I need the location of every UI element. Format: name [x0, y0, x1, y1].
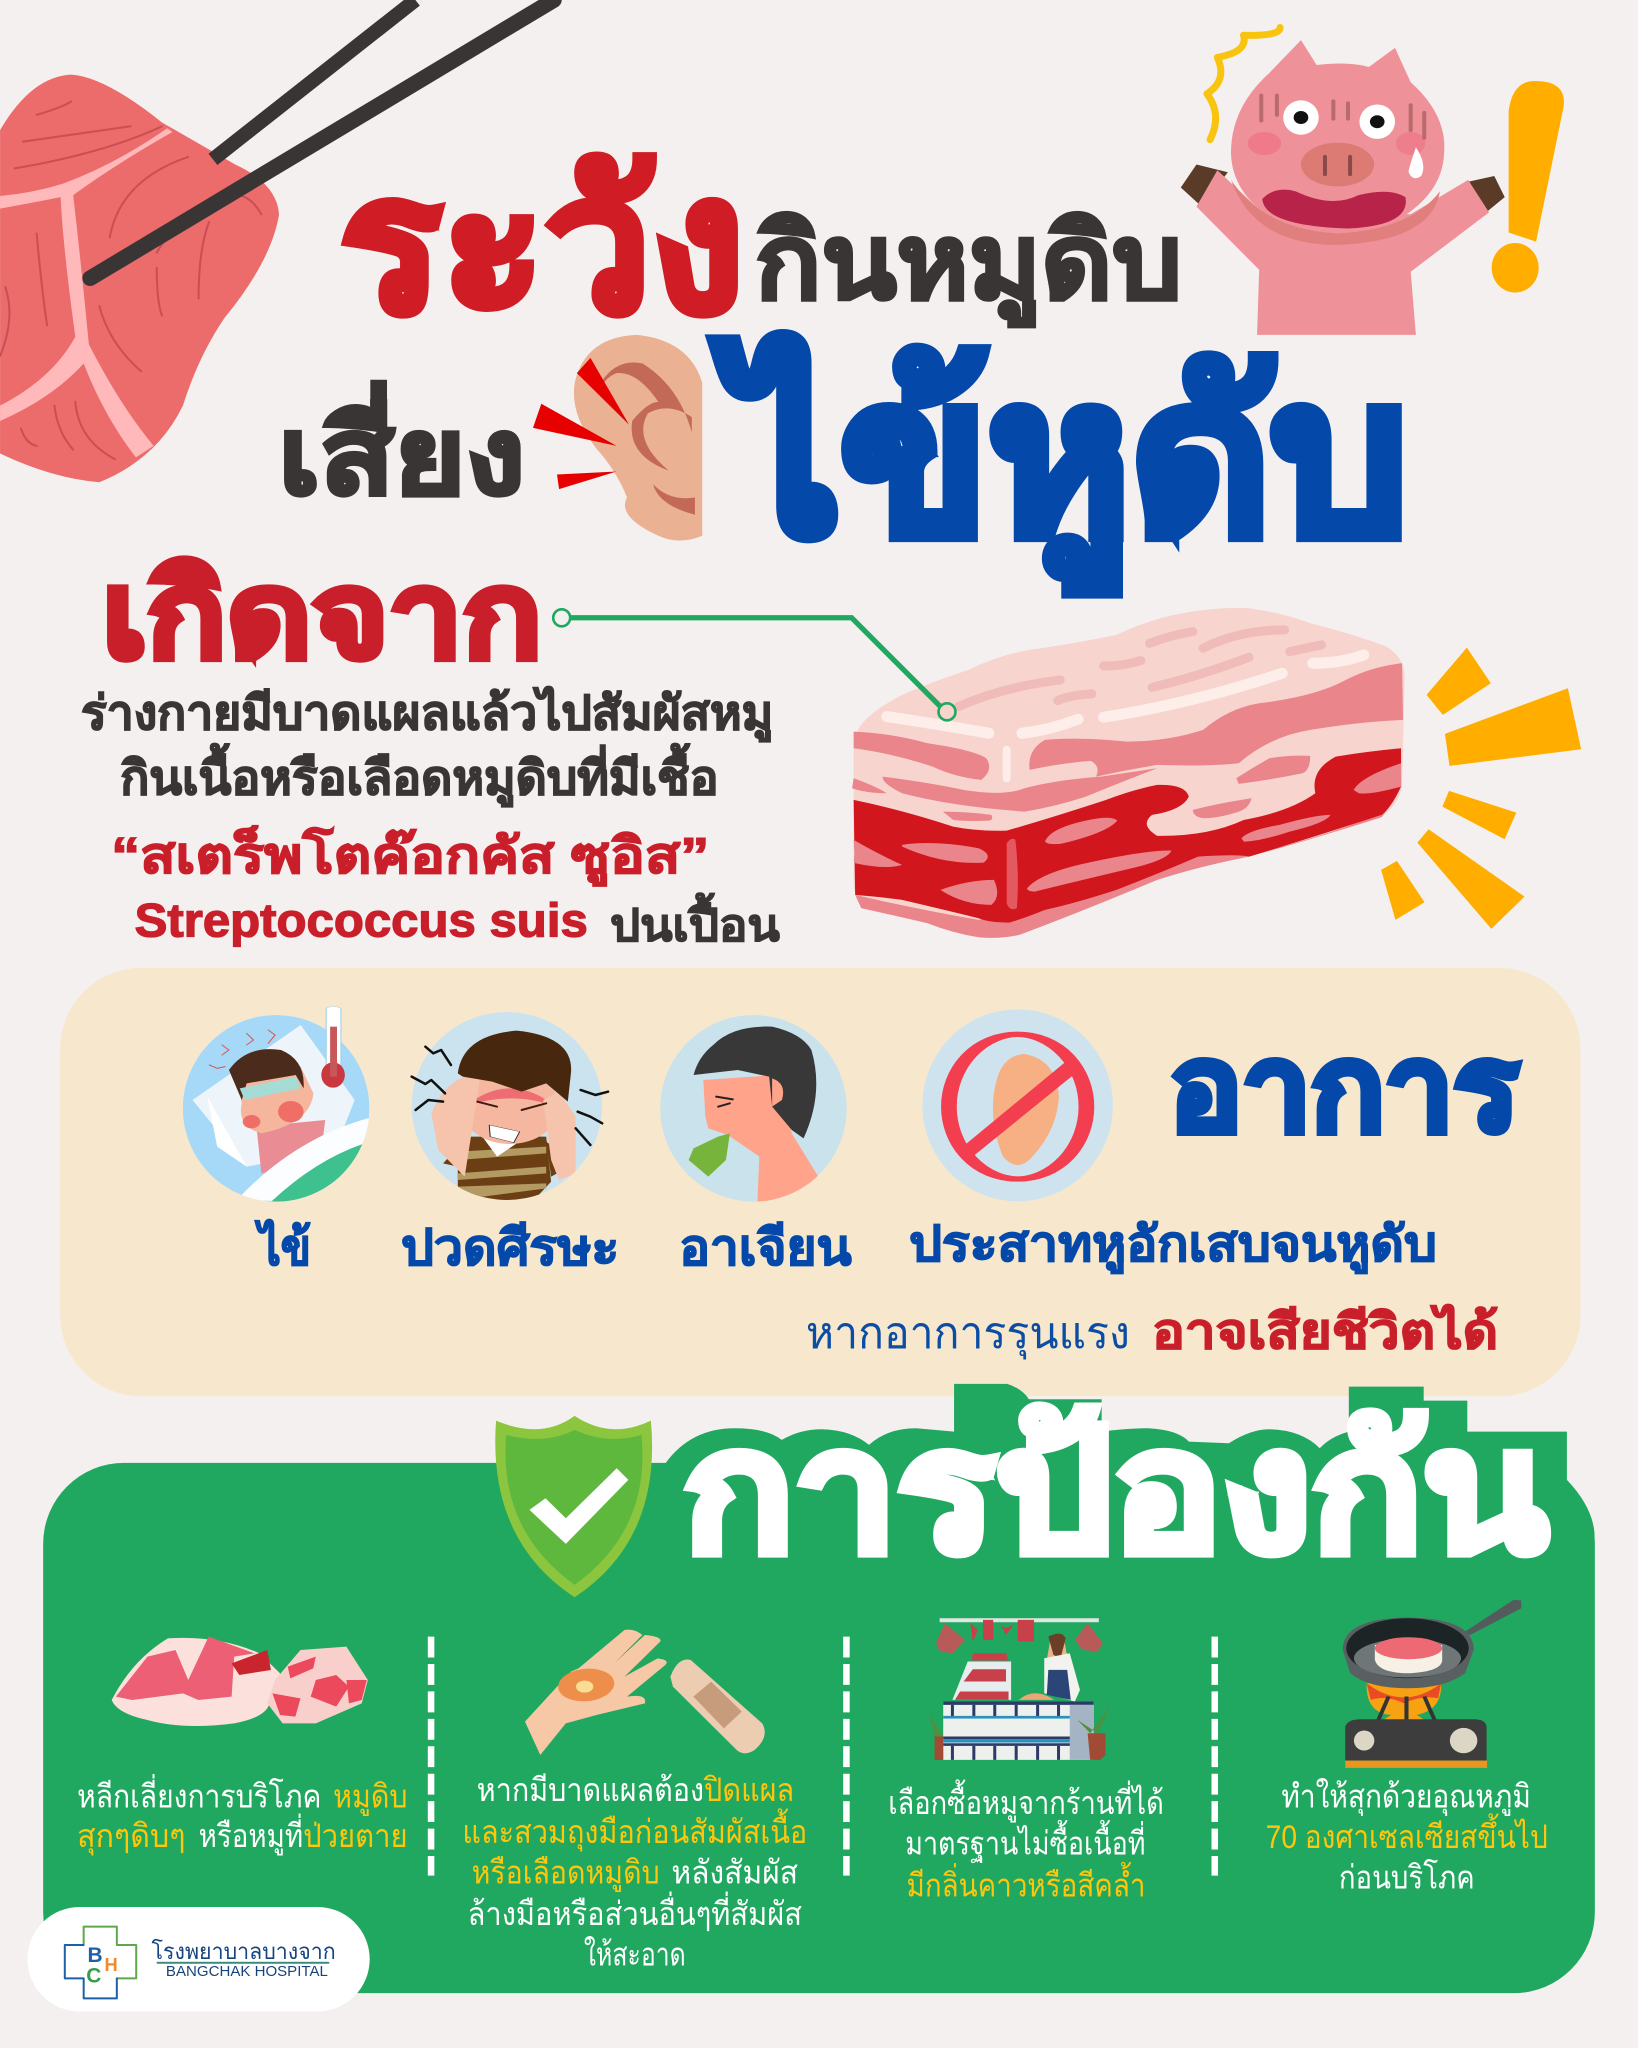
- text: เสี่ยง: เสี่ยง: [278, 382, 525, 517]
- item: cover wounds: [462, 1630, 807, 1973]
- panel: prevention: [43, 1384, 1595, 1993]
- logo: Bangchak Hospital: H: [105, 1954, 118, 1975]
- icon: shield with check: [495, 1416, 652, 1597]
- icon: vomiting: [660, 1015, 847, 1203]
- note: severity warning: หากอาการรุนแรง: [806, 1309, 1130, 1360]
- icon: wounded hand and plaster: [525, 1630, 765, 1755]
- label: ปวดศีรษะ: ปวดศีรษะ: [401, 1219, 619, 1275]
- note: severity warning: อาจเสียชีวิตได้: [1152, 1303, 1498, 1359]
- text: cover wounds: ปิดแผล: [704, 1771, 794, 1808]
- text: buy from standard shops: [888, 1779, 1164, 1903]
- text: cover wounds: และสวมถุงมือก่อนสัมผัสเนื้อ: [462, 1808, 807, 1852]
- item: cook thoroughly: [1266, 1600, 1548, 1896]
- illustration: shocked pig with exclamation mark: [1181, 28, 1564, 335]
- connector line from heading to pork: [553, 609, 955, 720]
- panel: symptoms: [60, 968, 1580, 1396]
- text: buy from standard shops: เลือกซื้อหมูจากร้านที่ได้: [888, 1779, 1164, 1823]
- text: cover wounds: [462, 1771, 807, 1973]
- icon: aching ear: [533, 335, 702, 541]
- label: ไข้: ไข้: [254, 1218, 311, 1275]
- item: avoid raw pork: [77, 1637, 408, 1856]
- text: buy from standard shops: มาตรฐานไม่ซื้อเนื้อที่: [905, 1820, 1146, 1864]
- text: cover wounds: หากมีบาดแผลต้อง: [477, 1771, 704, 1808]
- icon: pan on stove: [1343, 1600, 1521, 1768]
- text: cover wounds: ล้างมือหรือส่วนอื่นๆที่สัมผัส: [468, 1891, 802, 1932]
- heading: เกิดจาก: เกิดจาก: [102, 549, 542, 683]
- illustration: raw pork belly slab: [852, 608, 1405, 938]
- title: ไข้หูดับ: ไข้หูดับ: [713, 334, 1408, 593]
- logo: Bangchak Hospital: B: [88, 1944, 103, 1967]
- item: buy from standard shops: [888, 1618, 1164, 1903]
- note: severity warning: [806, 1303, 1498, 1360]
- text: cause description: ร่างกายมีบาดแผลแล้วไปสัมผัสหมู: [81, 685, 773, 743]
- title: ระวัง: ระวัง: [340, 139, 745, 352]
- text: cook thoroughly: ทำให้สุกด้วยอุณหภูมิ: [1281, 1778, 1531, 1817]
- text: avoid raw pork: หลีกเลี่ยงการบริโภค: [77, 1774, 321, 1815]
- text: cause description: [81, 685, 780, 950]
- illustration: raw pork held by chopsticks: [0, 0, 554, 482]
- icon: butcher shop: [929, 1618, 1111, 1760]
- text: avoid raw pork: [77, 1774, 408, 1856]
- text: cover wounds: หลังสัมผัส: [671, 1853, 798, 1890]
- text: cause description: Streptococcus suis: [135, 893, 588, 946]
- text: cause description: กินเนื้อหรือเลือดหมูดิบที่มีเชื้อ: [120, 743, 718, 808]
- text: avoid raw pork: ป่วยตาย: [303, 1817, 408, 1854]
- text: avoid raw pork: หมูดิบ: [333, 1778, 408, 1817]
- title: กินหมูดิบ: กินหมูดิบ: [755, 204, 1182, 327]
- text: cover wounds: ให้สะอาด: [584, 1936, 686, 1973]
- text: avoid raw pork: หรือหมูที่: [199, 1813, 303, 1856]
- heading: อาการ: อาการ: [1169, 1022, 1519, 1156]
- heading: การป้องกัน: การป้องกัน: [683, 1396, 1548, 1586]
- text: cook thoroughly: 70 องศาเซลเซียสขึ้นไป: [1266, 1813, 1548, 1855]
- text: buy from standard shops: มีกลิ่นคาวหรือสีคล้ำ: [907, 1861, 1146, 1903]
- text: cause description: ปนเปื้อน: [610, 892, 780, 950]
- label: ประสาทหูอักเสบจนหูดับ: ประสาทหูอักเสบจนหูดับ: [909, 1217, 1437, 1274]
- logo: Bangchak Hospital: โรงพยาบาลบางจาก: [152, 1939, 336, 1964]
- icon: orange burst lines: [1381, 648, 1581, 929]
- text: avoid raw pork: สุกๆดิบๆ: [77, 1817, 186, 1856]
- text: cook thoroughly: ก่อนบริโภค: [1339, 1859, 1475, 1896]
- text: cause description: “สเตร็พโตค๊อกคัส ซูอิส”: [111, 825, 709, 886]
- text: cook thoroughly: [1266, 1778, 1548, 1896]
- icon: fever: [183, 1015, 374, 1203]
- text: cover wounds: หรือเลือดหมูดิบ: [472, 1853, 660, 1892]
- icon: headache: [412, 1012, 602, 1201]
- logo: Bangchak Hospital: C: [86, 1965, 101, 1988]
- icon: no ear: [922, 1009, 1113, 1201]
- logo: Bangchak Hospital: BANGCHAK HOSPITAL: [166, 1964, 328, 1980]
- icon: pork cuts: [112, 1637, 368, 1726]
- label: อาเจียน: อาเจียน: [679, 1219, 852, 1275]
- dashed dividers: [431, 1637, 1215, 1876]
- logo: Bangchak Hospital: [27, 1907, 370, 2011]
